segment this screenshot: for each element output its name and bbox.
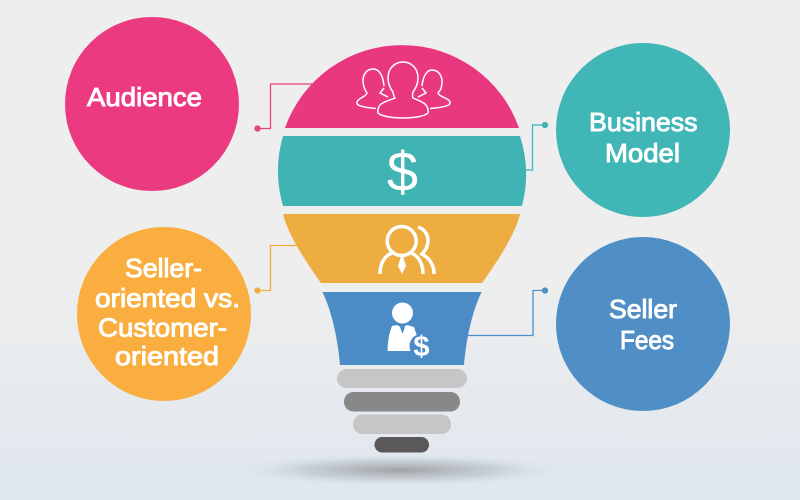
- label: business model: Model: [605, 138, 680, 168]
- bulb segment: pink: [285, 45, 519, 128]
- bulb segment: orange: [283, 214, 520, 283]
- label: seller fees: Seller: [609, 294, 677, 324]
- connector: business model: [524, 122, 548, 170]
- label: business model: Business: [589, 107, 698, 137]
- label: business model: [589, 107, 698, 168]
- icon: audience group: [357, 62, 450, 118]
- label: seller fees: Fees: [620, 325, 674, 355]
- bulb segment: blue: [322, 292, 482, 365]
- connector: audience: [255, 84, 314, 131]
- bulb base: [337, 369, 467, 452]
- label: seller-oriented vs customer-oriented: oriented: [115, 341, 219, 371]
- circle: seller-oriented vs customer-oriented: [77, 227, 251, 401]
- circle: business model: [556, 43, 730, 217]
- icon: businessman with dollar: [388, 302, 434, 363]
- connector: seller-oriented: [255, 246, 300, 293]
- icon: businessman with dollar: $: [413, 331, 430, 363]
- label: seller-oriented vs customer-oriented: Seller-: [125, 253, 202, 283]
- label: seller-oriented vs customer-oriented: [95, 253, 240, 371]
- label: seller fees: [609, 294, 677, 355]
- label: audience: Audience: [87, 82, 202, 112]
- bulb segment: teal: [278, 136, 526, 206]
- connector: seller fees: [468, 288, 548, 336]
- icon: businessmen: [380, 226, 434, 274]
- label: seller-oriented vs customer-oriented: oriented vs.: [95, 283, 240, 313]
- icon: dollar: $: [387, 140, 418, 203]
- circle: audience: [65, 17, 239, 191]
- bulb shadow: [225, 453, 575, 487]
- circle: seller fees: [556, 237, 730, 411]
- label: seller-oriented vs customer-oriented: Customer-: [98, 312, 227, 342]
